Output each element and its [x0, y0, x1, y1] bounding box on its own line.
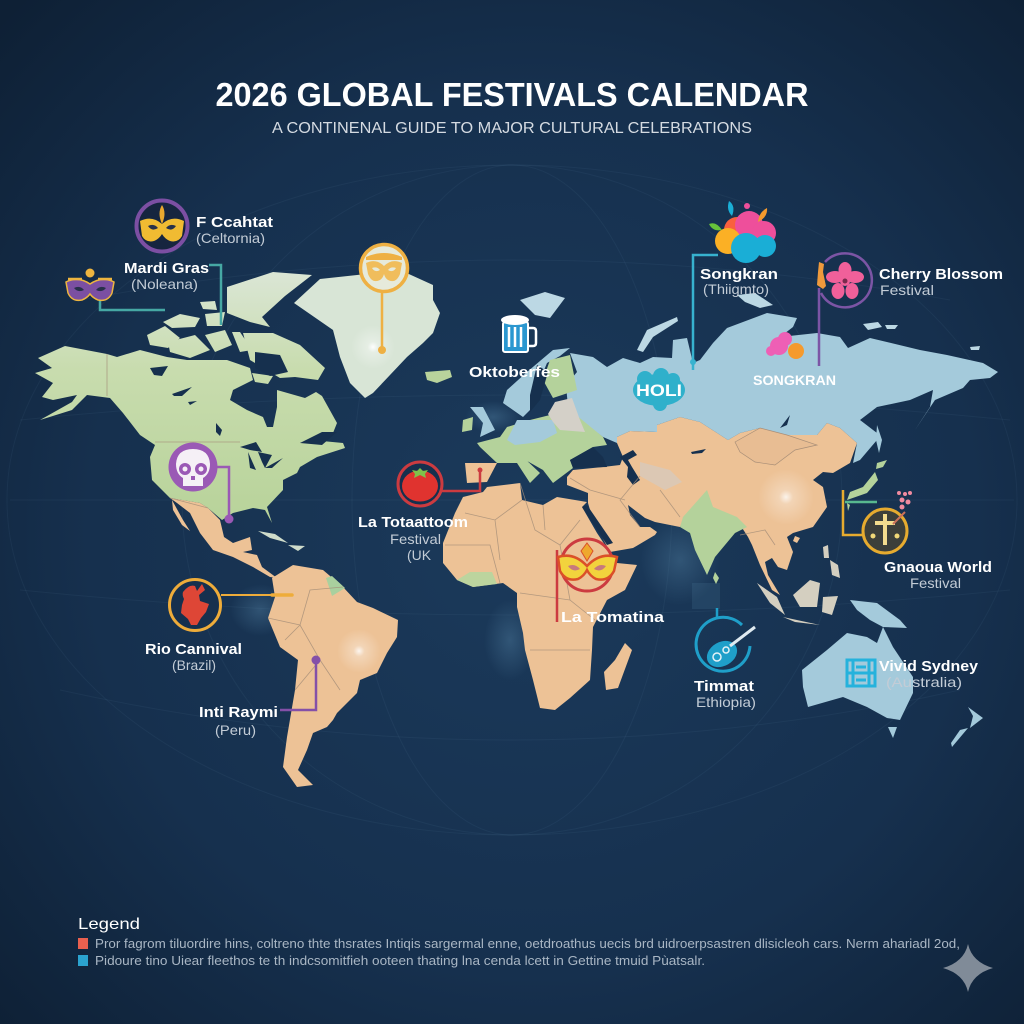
- icon: pink blossoms: [897, 491, 912, 510]
- water: inland seas: [530, 365, 790, 545]
- label: Vivid Sydney: [879, 658, 979, 675]
- icon: colour splash: [766, 332, 804, 359]
- island: Ireland: [462, 417, 473, 432]
- icon: purple mask: [66, 268, 114, 300]
- country borders: [107, 354, 775, 690]
- icon: gold cross ring: [863, 509, 907, 553]
- connector green: [845, 501, 877, 503]
- continent: South America: [268, 565, 398, 787]
- callout: Holi: [633, 368, 685, 411]
- legend heading: Legend: [78, 916, 140, 933]
- region: Guianas: [326, 576, 345, 596]
- islands: New Zealand: [951, 707, 983, 747]
- ocean haze: [230, 401, 720, 680]
- island: New Guinea: [850, 600, 907, 628]
- label: [700, 266, 778, 297]
- label: Mardi Gras: [124, 260, 209, 277]
- label: La Totaattoom: [358, 514, 468, 531]
- label: Oktoberfes: [469, 364, 560, 381]
- connector: [556, 550, 558, 622]
- connector lines: [100, 265, 221, 325]
- label: (Celtornia): [196, 230, 265, 246]
- island: Great Britain: [470, 407, 495, 437]
- callout: Songkran: [690, 201, 778, 370]
- pin dot: [478, 468, 482, 472]
- pin dot: [378, 346, 386, 354]
- legend: [78, 916, 960, 968]
- label: F Ccahtat: [196, 214, 273, 231]
- label: [196, 214, 273, 246]
- label: Gnaoua World: [884, 559, 992, 576]
- label: [199, 704, 278, 738]
- region: central Asia tint: [640, 462, 682, 490]
- icon: teal cloud: [633, 368, 685, 411]
- connector: [381, 292, 383, 349]
- callout: Inti Raymi: [199, 656, 320, 738]
- island: Tasmania: [888, 727, 897, 738]
- icon: blue opera pattern: [847, 660, 875, 686]
- continent: North America: [35, 272, 345, 523]
- region: Western Europe: [477, 410, 607, 483]
- title: 2026 GLOBAL FESTIVALS CALENDAR: [216, 76, 809, 113]
- region: India: [680, 490, 747, 575]
- label: (Peru): [215, 722, 256, 738]
- region: Scandinavia: [503, 348, 570, 417]
- island: Madagascar: [604, 643, 632, 690]
- label: (Australia): [886, 674, 962, 690]
- islands: Caribbean: [258, 531, 305, 551]
- label: Rio Cannival: [145, 641, 242, 658]
- label: [694, 678, 756, 710]
- icon: purple circle mask: [136, 200, 188, 252]
- region: Iberia: [465, 463, 497, 483]
- icon: beer mug: [501, 315, 536, 352]
- label: Ethiopia): [696, 694, 756, 710]
- glow spots: [337, 325, 814, 673]
- pin dot: [312, 656, 320, 664]
- island: Sakhalin: [876, 425, 882, 453]
- connector: [280, 660, 316, 710]
- callout: La Tomatina: [557, 539, 665, 626]
- pin dot: [224, 514, 234, 524]
- continent: Greenland: [294, 270, 440, 398]
- label: Festival: [390, 531, 441, 547]
- callout: Vivid Sydney: [847, 658, 979, 690]
- label: Festival: [910, 575, 961, 591]
- label: [879, 266, 1003, 298]
- label: (Thiigmto): [703, 281, 769, 297]
- label: (Noleana): [131, 276, 198, 292]
- label: [124, 260, 209, 292]
- callout: Fcahtat: [136, 200, 273, 252]
- label: [145, 641, 242, 673]
- legend text line 1: Pror fagrom tiluordire hins, coltreno thte thsrates Intiqis sargermal enne, oetdroathus uecis brd uidroerpsastren dlisicleoh cars. Nerm ahariadl 2od,: [95, 937, 960, 951]
- region: Russia: [566, 313, 998, 463]
- icon: colour burst: [709, 201, 776, 263]
- continent: Asia: [567, 417, 857, 595]
- label: (Brazil): [172, 657, 216, 673]
- legend text line 2: Pidoure tino Uiear fleethos te th indcsomitfieh ooteen thating lna cenda lcett in Gettine tmuid Pùatsalr.: [95, 954, 705, 968]
- label: (UK: [407, 547, 432, 563]
- connector: [442, 470, 480, 491]
- label: La Tomatina: [561, 609, 665, 626]
- legend swatch: red: [78, 938, 88, 949]
- legend swatch: blue: [78, 955, 88, 966]
- connector end: [272, 593, 292, 597]
- continent: Australia: [802, 627, 913, 720]
- connector: [818, 288, 820, 366]
- icon: sugar skull: [168, 442, 218, 492]
- callout: Songkran on Russia: [753, 332, 836, 388]
- region: Mongolia: [735, 428, 817, 465]
- connector: [217, 467, 229, 519]
- icon: red figure ring: [170, 580, 220, 630]
- callout: Mardi Gras: [66, 260, 221, 325]
- islands: Japan: [847, 460, 887, 511]
- callout: Gnaoua World: [843, 490, 992, 591]
- island: Sri Lanka: [713, 572, 719, 584]
- callout: skull: [168, 442, 234, 524]
- label: Songkran: [700, 266, 778, 283]
- callout: Timmat: [694, 608, 756, 710]
- island: Iceland: [425, 370, 452, 383]
- island: Novaya Zemlya: [637, 317, 678, 352]
- callout: La Tomatatoom: [358, 462, 482, 563]
- pin tip: [690, 359, 696, 365]
- icon: lute: [696, 617, 755, 672]
- islands: Russian Arctic: [520, 292, 980, 350]
- icon: orange leaves: [817, 262, 826, 289]
- label: HOLI: [636, 381, 682, 400]
- label: Festival: [880, 282, 934, 298]
- connector gold: [843, 490, 862, 535]
- region: West Africa green: [457, 572, 497, 587]
- icon: cherry blossom: [826, 262, 864, 299]
- label: [358, 514, 468, 563]
- icon: sparkle: [943, 944, 993, 992]
- connector: [693, 255, 718, 370]
- label: [879, 658, 979, 690]
- callout: Rio Cannival: [145, 580, 292, 673]
- ring: [821, 253, 872, 307]
- label: Cherry Blossom: [879, 266, 1003, 283]
- label: [884, 559, 992, 591]
- callout: Greenland mask pin: [360, 244, 408, 354]
- icon: tomato: [398, 462, 442, 506]
- region: Baltics and Belarus: [548, 398, 585, 432]
- connector: [221, 594, 273, 596]
- world map: [35, 270, 998, 787]
- region: Central Europe: [507, 420, 557, 445]
- continent: Africa: [443, 483, 637, 710]
- label: SONGKRAN: [753, 373, 836, 388]
- island: Hainan: [793, 536, 800, 543]
- region: Finland: [543, 355, 577, 398]
- label: Inti Raymi: [199, 704, 278, 721]
- icon: red and gold mask: [558, 539, 617, 591]
- label: Timmat: [694, 678, 754, 695]
- water: North American lakes and bays: [150, 352, 337, 470]
- subtitle: A CONTINENAL GUIDE TO MAJOR CULTURAL CELEBRATIONS: [272, 120, 752, 137]
- callout: Oktoberfest: [469, 315, 560, 381]
- region: Mexico and Central America: [170, 498, 277, 578]
- icon: gold mask ring: [360, 244, 408, 292]
- callout: Cherry Blossom: [817, 253, 1003, 366]
- islands: Southeast Asia: [757, 545, 840, 625]
- connector: [716, 608, 718, 618]
